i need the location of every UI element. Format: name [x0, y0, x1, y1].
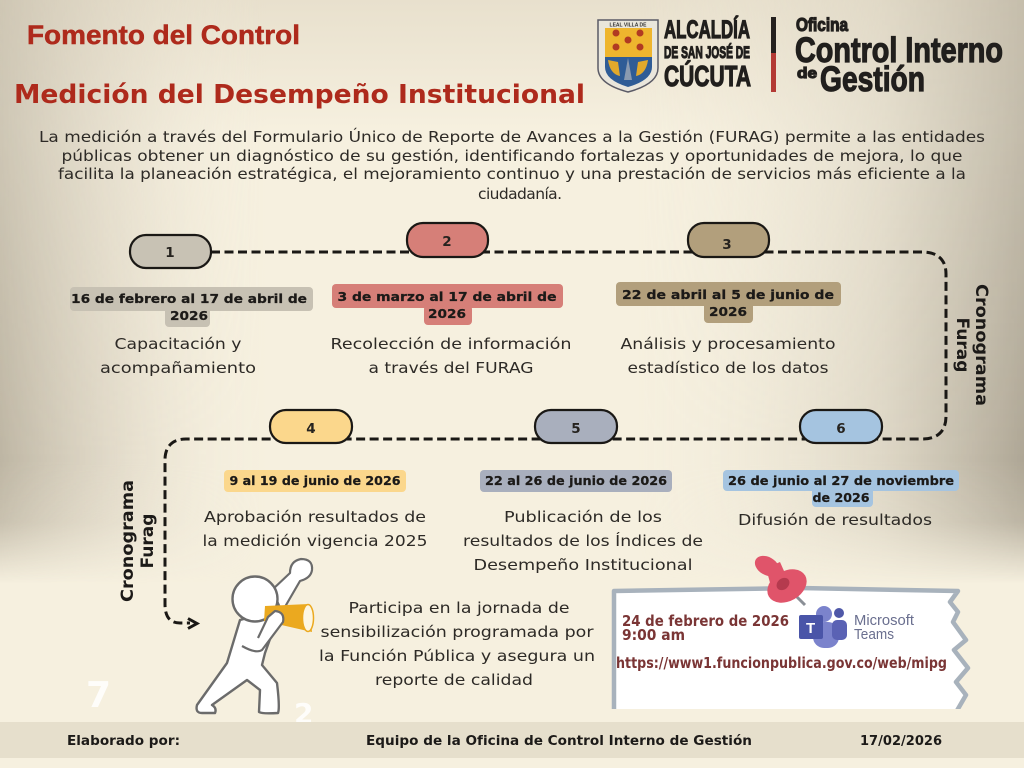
step 6 description: Difusión de resultados — [738, 511, 932, 529]
icon: figure with megaphone — [197, 559, 314, 713]
icon: Microsoft Teams — [799, 606, 914, 648]
timeline dashed connector — [165, 252, 946, 623]
raised arm — [272, 559, 312, 612]
step 5 date: 22 al 26 de junio de 2026 — [485, 473, 667, 488]
side label left: Cronograma Furag — [118, 480, 158, 602]
step 3 description: estadístico de los datos — [628, 359, 828, 377]
step 1 date: 16 de febrero al 17 de abril de — [71, 291, 307, 306]
step 5 description: Desempeño Institucional — [474, 556, 692, 574]
footer band: Elaborado por: — [67, 734, 180, 749]
step 2 description: Recolección de información — [330, 335, 572, 353]
event date: 24 de febrero de 2026 — [622, 612, 789, 630]
title: Fomento del Control: Fomento del Control — [27, 20, 300, 50]
logo: Alcaldía de San José de Cúcuta and Oficina Control Interno — [598, 15, 1003, 99]
intro paragraph — [39, 127, 985, 203]
faint numbers — [86, 675, 313, 730]
intro paragraph: públicas obtener un diagnóstico de su gestión, identificando fortalezas y oportunidades de mejora, lo que — [62, 147, 962, 165]
step 6 pill: 6 — [836, 421, 846, 437]
note paper — [614, 588, 968, 714]
step 1 description: Capacitación y — [114, 335, 242, 353]
step 4 description — [202, 508, 428, 550]
step 2 date — [332, 284, 563, 325]
call to action text: reporte de calidad — [375, 671, 533, 689]
call to action text — [319, 599, 595, 689]
event date: 9:00 am — [622, 626, 685, 644]
logo divider — [771, 17, 776, 92]
logo: Alcaldía de San José de Cúcuta and Oficina Control Interno: de — [797, 65, 817, 82]
step 1 pill — [130, 235, 211, 268]
icon: Microsoft Teams: Teams — [854, 627, 894, 643]
call to action text: sensibilización programada por — [320, 623, 594, 641]
logo: Alcaldía de San José de Cúcuta and Oficina Control Interno: Gestión — [820, 60, 925, 99]
step 2 date: 3 de marzo al 17 de abril de — [338, 289, 556, 304]
footer band: 17/02/2026 — [860, 734, 942, 749]
step 1 pill: 1 — [165, 245, 175, 261]
step 2 pill: 2 — [442, 234, 452, 250]
step 4 date: 9 al 19 de junio de 2026 — [230, 473, 401, 488]
background — [0, 0, 1024, 576]
step 5 description: Publicación de los — [504, 508, 662, 526]
step 5 pill: 5 — [571, 421, 581, 437]
step 3 date — [616, 282, 841, 323]
step 3 — [616, 223, 841, 377]
step 5 — [463, 410, 703, 574]
step 1 description — [100, 335, 256, 377]
side label left: Cronograma Furag: Furag — [138, 514, 158, 568]
step 3 description — [620, 335, 836, 377]
step 2 pill — [407, 223, 488, 257]
step 4 pill — [270, 410, 352, 443]
side label right: Cronograma Furag: Cronograma — [971, 284, 991, 406]
step 6 — [723, 410, 959, 529]
logo: Alcaldía de San José de Cúcuta and Oficina Control Interno: DE SAN JOSÉ DE — [664, 43, 750, 62]
step 3 date: 22 de abril al 5 de junio de — [622, 287, 834, 302]
step 3 description: Análisis y procesamiento — [620, 335, 836, 353]
arrow head — [188, 618, 197, 628]
step 6 pill — [800, 410, 882, 443]
icon: red push pin — [751, 552, 813, 609]
icon: Microsoft Teams: T — [806, 620, 815, 637]
step 5 description: resultados de los Índices de — [463, 531, 703, 550]
call to action text: Participa en la jornada de — [348, 599, 570, 617]
side label right: Cronograma Furag: Furag — [952, 318, 972, 372]
step 4 description: Aprobación resultados de — [204, 508, 426, 526]
step 6 date: de 2026 — [812, 490, 870, 505]
heading: Medición del Desempeño Institucional: Medición del Desempeño Institucional — [14, 80, 585, 110]
logo: Alcaldía de San José de Cúcuta and Oficina Control Interno: Oficina — [796, 15, 849, 35]
faint numbers: 2 — [294, 697, 313, 730]
icon: Microsoft Teams: Microsoft — [854, 613, 914, 629]
step 2 — [330, 223, 572, 377]
step 5 pill — [535, 410, 617, 443]
intro paragraph: ciudadanía. — [478, 185, 562, 203]
step 4 — [202, 410, 428, 550]
event link: https://www1.funcionpublica.gov.co/web/mipg — [616, 654, 947, 672]
side label right: Cronograma Furag — [952, 284, 991, 406]
intro paragraph: La medición a través del Formulario Único de Reporte de Avances a la Gestión (FURAG) permite a las entidades — [39, 127, 985, 146]
step 2 description: a través del FURAG — [368, 359, 534, 377]
step 6 date: 26 de junio al 27 de noviembre — [728, 473, 954, 488]
step 3 date: 2026 — [709, 304, 747, 319]
footer band — [0, 722, 1024, 758]
logo: Alcaldía de San José de Cúcuta and Oficina Control Interno: CÚCUTA — [664, 59, 751, 93]
step 1 date: 2026 — [170, 308, 208, 323]
body — [197, 612, 283, 713]
faint numbers: 7 — [86, 675, 111, 716]
step 3 pill — [688, 223, 769, 257]
note card — [606, 552, 972, 719]
step 5 date — [480, 470, 672, 492]
front arm — [242, 611, 283, 651]
side label left: Cronograma Furag: Cronograma — [118, 480, 138, 602]
intro paragraph: facilita la planeación estratégica, el mejoramiento continuo y una prestación de servicios más eficiente a la — [58, 165, 966, 183]
step 5 description — [463, 508, 703, 574]
footer band: Equipo de la Oficina de Control Interno de Gestión — [366, 734, 752, 749]
icon: coat of arms shield — [598, 20, 658, 92]
megaphone — [264, 604, 314, 632]
head — [232, 576, 278, 622]
step 2 date: 2026 — [428, 306, 466, 321]
step 1 — [70, 235, 313, 377]
step 3 pill: 3 — [722, 237, 732, 253]
step 6 date — [723, 470, 959, 507]
step 1 date — [70, 287, 313, 327]
step 4 description: la medición vigencia 2025 — [202, 532, 428, 550]
step 4 date — [224, 470, 406, 492]
icon: coat of arms shield: LEAL VILLA DE — [610, 22, 647, 28]
call to action text: la Función Pública y asegura un — [319, 647, 595, 665]
logo: Alcaldía de San José de Cúcuta and Oficina Control Interno: ALCALDÍA — [664, 15, 750, 44]
step 1 description: acompañamiento — [100, 359, 256, 377]
step 2 description — [330, 335, 572, 377]
step 4 pill: 4 — [306, 421, 316, 437]
event date — [622, 612, 789, 644]
